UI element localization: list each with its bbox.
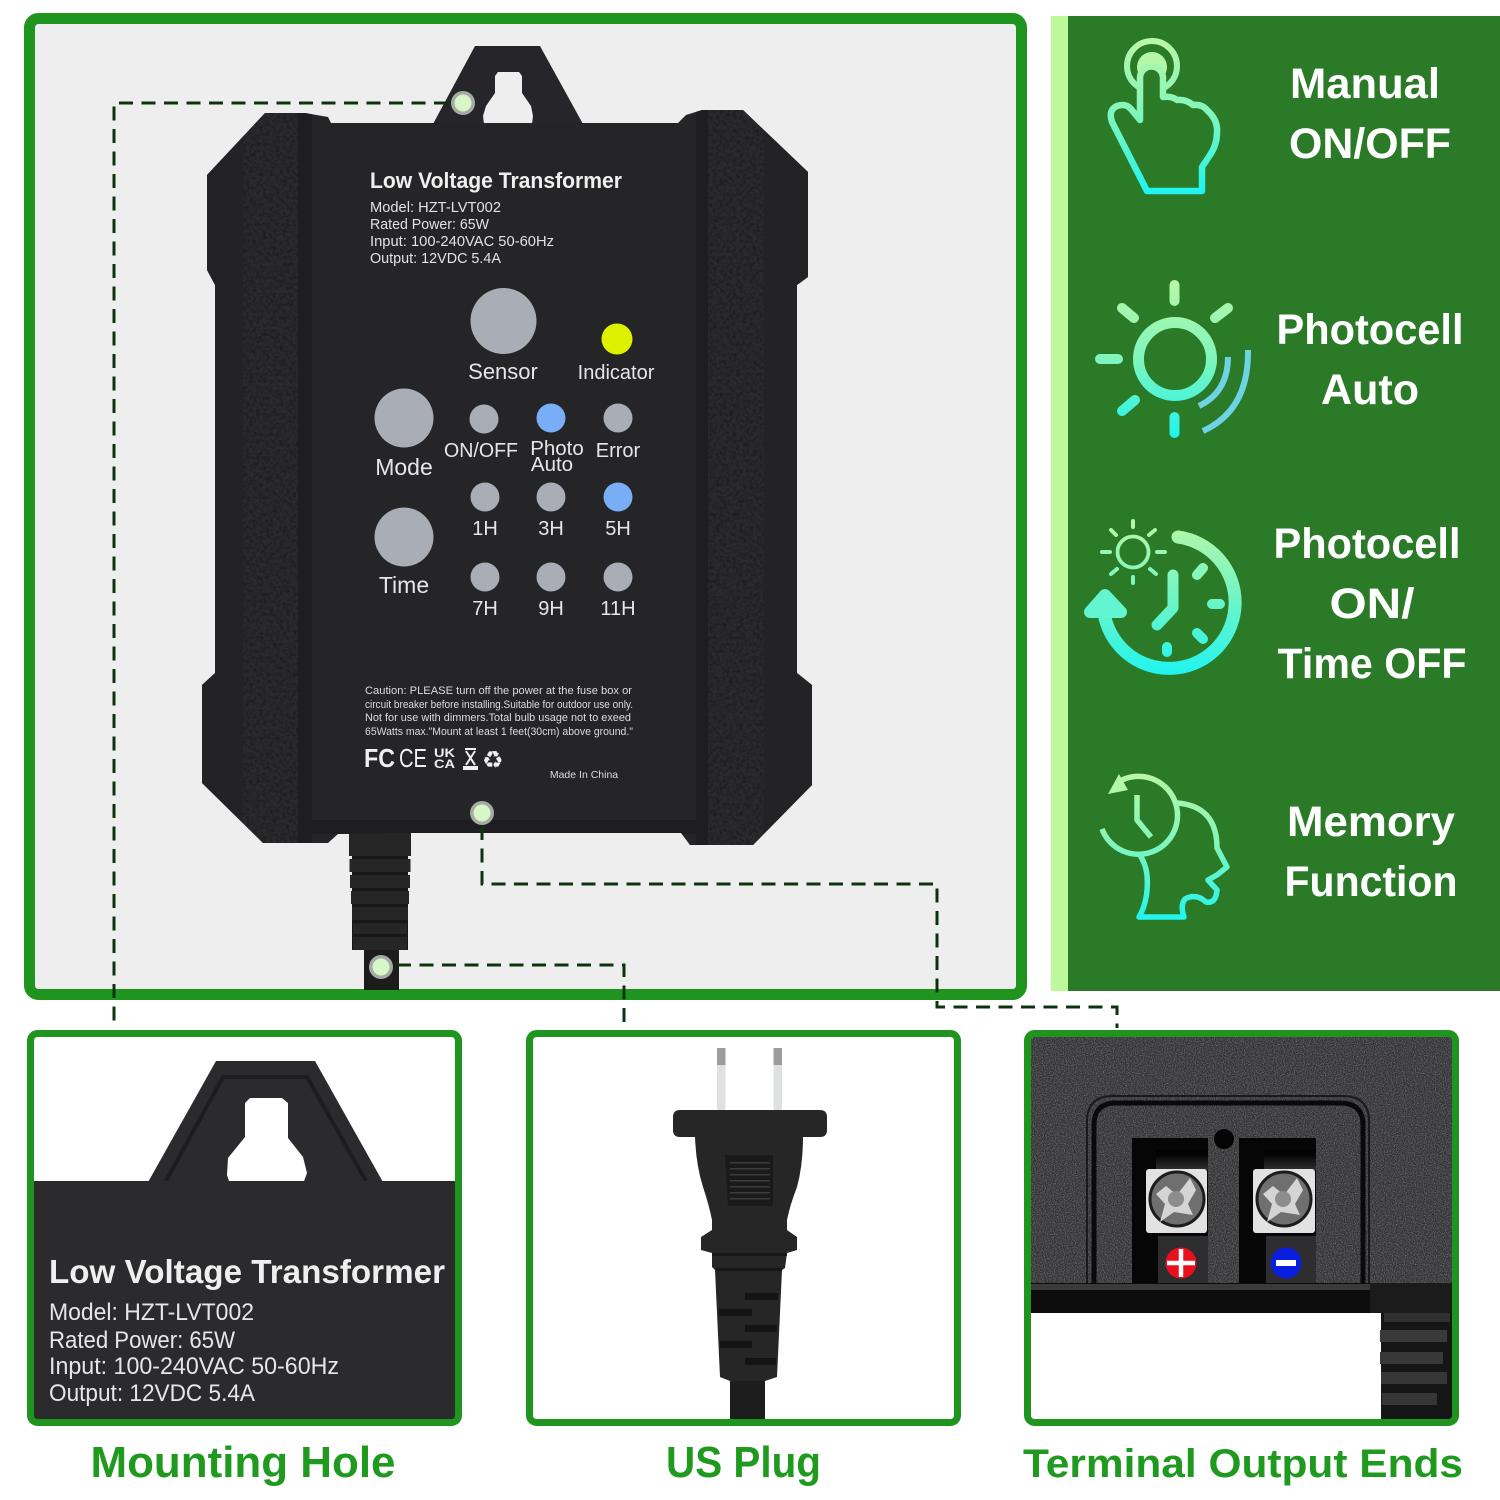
control labels: 7H bbox=[472, 598, 498, 620]
text: photocell on / time off: Time OFF bbox=[1278, 640, 1466, 688]
panel: us plug detail bbox=[530, 1034, 958, 1422]
control labels: 11H bbox=[600, 598, 636, 620]
made in china: Made In China bbox=[550, 769, 618, 781]
transformer device bbox=[200, 46, 814, 990]
icon: head with clock bbox=[1102, 774, 1227, 917]
heading: terminal output ends: Terminal Output Ends bbox=[1023, 1442, 1463, 1486]
device body bbox=[202, 110, 812, 845]
control labels: Sensor bbox=[468, 359, 538, 384]
panel: mounting hole detail bbox=[30, 1034, 458, 1422]
buttons and indicators bbox=[374, 288, 632, 592]
model label text: Model: HZT-LVT002 bbox=[370, 200, 501, 216]
control labels: Mode bbox=[375, 454, 433, 480]
model label text: Low Voltage Transformer bbox=[370, 168, 622, 193]
panel: main product panel bbox=[30, 18, 1117, 1028]
model label text: Input: 100-240VAC 50-60Hz bbox=[370, 234, 554, 250]
certification marks: UK bbox=[434, 748, 456, 760]
mounting tab closeup bbox=[147, 1061, 384, 1184]
right screw bbox=[1253, 1169, 1315, 1233]
control labels: ON/OFF bbox=[444, 440, 518, 462]
negative marker bbox=[1270, 1248, 1302, 1278]
ribbed strain relief bbox=[1370, 1283, 1452, 1419]
text: manual on/off: Manual bbox=[1290, 60, 1440, 108]
closeup label text bbox=[49, 1253, 445, 1407]
textured housing bbox=[1031, 1037, 1452, 1283]
icon: sun with sensor waves bbox=[1100, 285, 1248, 433]
control labels: 3H bbox=[538, 518, 564, 540]
control labels: Auto bbox=[531, 453, 573, 476]
text: photocell on / time off: Photocell bbox=[1274, 520, 1460, 568]
heading: us plug: US Plug bbox=[666, 1438, 821, 1487]
grip ridges bbox=[712, 1155, 787, 1365]
terminal window right bbox=[1239, 1138, 1316, 1285]
dark label block bbox=[34, 1181, 455, 1419]
certification marks: CA bbox=[434, 759, 455, 771]
certification marks: ♻ bbox=[482, 747, 504, 774]
text: photocell auto: Auto bbox=[1321, 366, 1419, 414]
caution text: circuit breaker before installing.Suitable for outdoor use only. bbox=[365, 699, 633, 711]
text: photocell on / time off: ON/ bbox=[1330, 580, 1415, 628]
caution text: 65Watts max."Mount at least 1 feet(30cm) above ground." bbox=[365, 726, 633, 738]
text: photocell auto bbox=[1276, 306, 1464, 414]
caution text bbox=[365, 685, 633, 738]
control labels: Error bbox=[596, 440, 641, 462]
caution text: Caution: PLEASE turn off the power at the fuse box or bbox=[365, 685, 632, 697]
certification marks: CE bbox=[399, 743, 427, 773]
housing ledge bbox=[1031, 1283, 1452, 1313]
text: memory function: Memory bbox=[1287, 798, 1455, 846]
control labels: Photo bbox=[530, 437, 584, 460]
cable below strain relief bbox=[364, 948, 399, 990]
terminal window left bbox=[1132, 1138, 1208, 1285]
icon: hand pressing bbox=[1111, 41, 1217, 191]
control labels: Time bbox=[379, 572, 429, 598]
dashed connector: mounting hole bbox=[114, 103, 448, 1025]
strain relief bbox=[349, 832, 411, 950]
control labels: 1H bbox=[472, 518, 498, 540]
positive marker bbox=[1166, 1248, 1196, 1278]
panel: feature sidebar bbox=[1051, 16, 1500, 991]
mounting tab bbox=[433, 46, 583, 124]
control labels: 5H bbox=[605, 518, 631, 540]
closeup label text: Output: 12VDC 5.4A bbox=[49, 1380, 255, 1407]
model label text bbox=[370, 168, 622, 267]
text: manual on/off: ON/OFF bbox=[1289, 120, 1451, 168]
left screw bbox=[1146, 1169, 1207, 1233]
certification marks: FC bbox=[364, 743, 395, 773]
marker dots bbox=[369, 91, 494, 979]
text: manual on/off bbox=[1289, 60, 1451, 168]
model label text: Output: 12VDC 5.4A bbox=[370, 251, 501, 267]
certification marks bbox=[364, 743, 504, 774]
text: photocell on / time off bbox=[1274, 520, 1466, 688]
dashed connector: terminal ends bbox=[482, 826, 1117, 1028]
caution text: Not for use with dimmers.Total bulb usage not to exeed bbox=[365, 712, 631, 724]
text: memory function: Function bbox=[1284, 858, 1458, 906]
model label text: Rated Power: 65W bbox=[370, 217, 489, 233]
text: photocell auto: Photocell bbox=[1276, 306, 1464, 354]
screw hole bbox=[1214, 1129, 1234, 1149]
control labels bbox=[375, 359, 655, 620]
panel: terminal output detail bbox=[1028, 1034, 1456, 1422]
device rails with texture bbox=[200, 105, 814, 850]
recessed frame bbox=[1094, 1103, 1363, 1283]
control labels: 9H bbox=[538, 598, 564, 620]
closeup label text: Input: 100-240VAC 50-60Hz bbox=[49, 1353, 339, 1380]
heading: mounting hole: Mounting Hole bbox=[90, 1438, 396, 1487]
closeup label text: Rated Power: 65W bbox=[49, 1327, 235, 1354]
closeup label text: Low Voltage Transformer bbox=[49, 1253, 445, 1290]
cable bbox=[730, 1375, 765, 1419]
text: memory function bbox=[1284, 798, 1458, 906]
plug prongs bbox=[717, 1048, 782, 1110]
closeup label text: Model: HZT-LVT002 bbox=[49, 1299, 254, 1326]
plug body bbox=[673, 1110, 827, 1381]
dashed connector: us plug bbox=[397, 965, 624, 1025]
control labels: Indicator bbox=[578, 362, 655, 384]
icon: timer with sun bbox=[1090, 521, 1235, 668]
